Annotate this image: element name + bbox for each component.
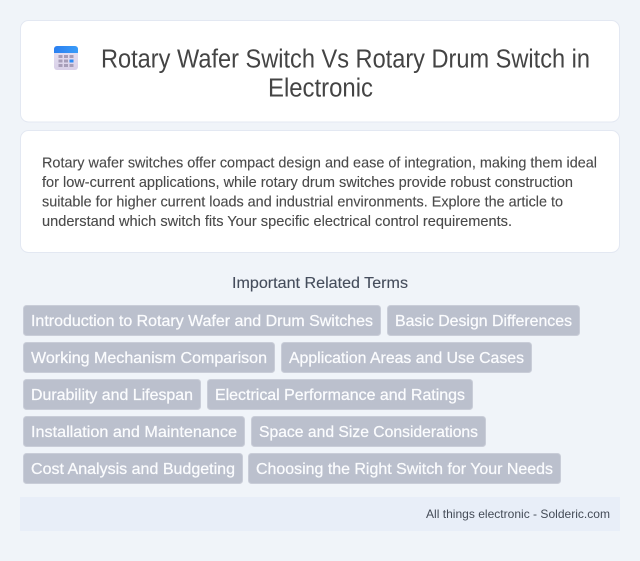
title: Electronic bbox=[268, 74, 373, 102]
title: Rotary Wafer Switch Vs Rotary Drum Switch in bbox=[101, 46, 590, 74]
tag: electrical performance bbox=[208, 380, 472, 410]
summary paragraph bbox=[42, 156, 597, 230]
summary paragraph: understand which switch fits Your specific electrical control requirements. bbox=[42, 214, 512, 230]
tag: introduction bbox=[24, 306, 380, 336]
tag: working mechanism: Working Mechanism Comparison bbox=[31, 350, 267, 367]
tag: working mechanism bbox=[24, 342, 274, 372]
tag: design differences: Basic Design Differences bbox=[395, 313, 572, 330]
summary paragraph: Rotary wafer switches offer compact design and ease of integration, making them ideal bbox=[42, 156, 597, 172]
icon: calendar grid bbox=[54, 46, 78, 70]
footer bar: All things electronic - Solderic.com bbox=[426, 507, 610, 521]
heading: important related terms: Important Related Terms bbox=[232, 275, 408, 292]
tag: durability: Durability and Lifespan bbox=[31, 387, 193, 404]
summary paragraph: for low-current applications, while rotary drum switches provide robust construction bbox=[42, 175, 573, 191]
tag: cost analysis bbox=[24, 454, 242, 484]
tag: installation: Installation and Maintenance bbox=[31, 424, 237, 441]
footer bar bbox=[20, 497, 620, 531]
title bbox=[101, 46, 590, 102]
tag: choosing the switch: Choosing the Right Switch for Your Needs bbox=[256, 461, 553, 478]
tag: electrical performance: Electrical Performance and Ratings bbox=[215, 387, 465, 404]
tag: cost analysis: Cost Analysis and Budgeting bbox=[31, 461, 235, 478]
tag: introduction: Introduction to Rotary Wafer and Drum Switches bbox=[31, 313, 373, 330]
summary paragraph: suitable for higher current loads and industrial environments. Explore the article to bbox=[42, 194, 563, 210]
tag: application areas bbox=[282, 342, 532, 372]
panel: summary text card bbox=[20, 130, 620, 252]
tag: durability bbox=[24, 380, 200, 410]
tag: choosing the switch bbox=[248, 454, 560, 484]
tag: design differences bbox=[388, 306, 580, 336]
panel: title card bbox=[20, 20, 620, 122]
tag list bbox=[24, 306, 580, 484]
tag: space and size bbox=[252, 416, 486, 446]
tag: application areas: Application Areas and Use Cases bbox=[289, 350, 524, 367]
tag: installation bbox=[24, 416, 244, 446]
tag: space and size: Space and Size Considerations bbox=[259, 424, 478, 441]
